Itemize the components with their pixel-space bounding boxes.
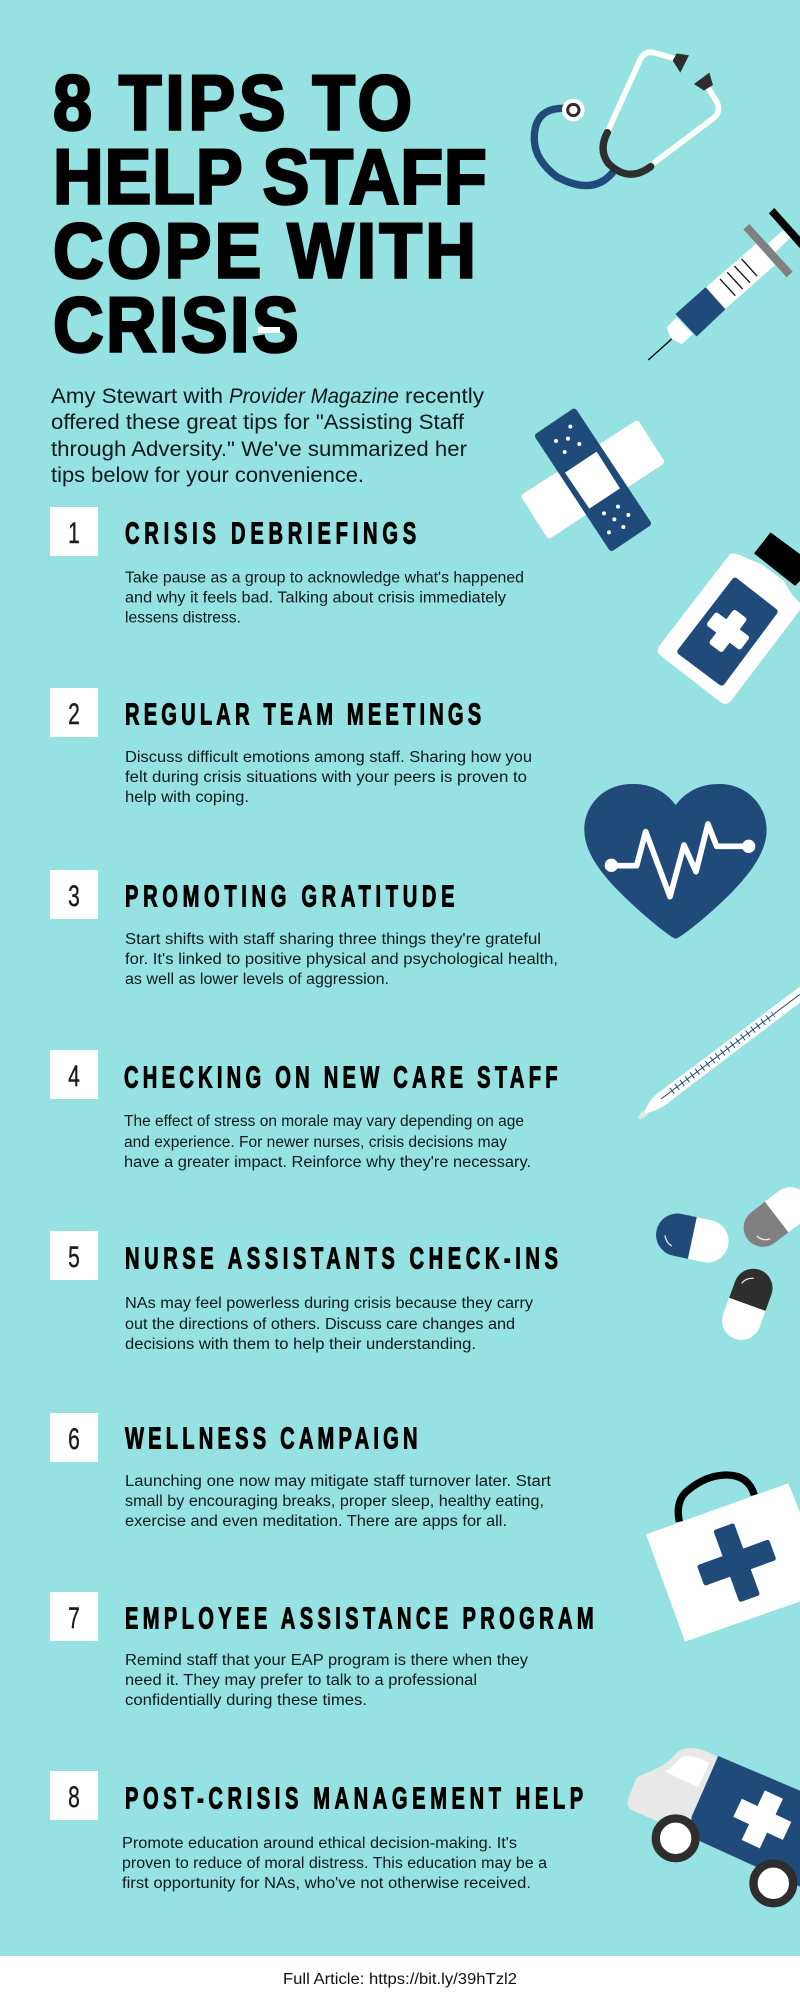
footer link text: Full Article: https://bit.ly/39hTzl2: [283, 1971, 517, 1988]
body text: tip 2: [125, 749, 532, 806]
number badge 3: 3: [68, 881, 80, 913]
icon: syringe: [648, 208, 800, 360]
body text: tip 8: first opportunity for NAs, who've not otherwise received.: [122, 1875, 531, 1892]
intro text: recently: [405, 385, 485, 408]
panel: tip 7: [50, 1592, 594, 1709]
number badge 8: [50, 1771, 98, 1820]
body text: tip 4: and experience. For newer nurses, crisis decisions may: [124, 1134, 507, 1151]
number badge 4: [50, 1050, 98, 1099]
number badge 2: 2: [68, 699, 80, 731]
heading: post-crisis management help: POST-CRISIS MANAGEMENT HELP: [125, 1780, 583, 1816]
heading: nurse assistants check-ins: NURSE ASSISTANTS CHECK-INS: [125, 1240, 558, 1276]
icon: bandage: [525, 412, 661, 548]
body text: tip 6: Launching one now may mitigate staff turnover later. Start: [125, 1473, 552, 1490]
body text: tip 2: felt during crisis situations with your peers is proven to: [125, 769, 527, 786]
number badge 6: 6: [68, 1424, 80, 1456]
body text: tip 5: out the directions of others. Discuss care changes and: [125, 1316, 515, 1333]
body text: tip 1: [125, 570, 524, 626]
panel: tip 8: [50, 1771, 583, 1892]
heading: wellness campaign: WELLNESS CAMPAIGN: [125, 1420, 418, 1456]
number badge 6: [50, 1413, 98, 1462]
body text: tip 8: [122, 1835, 547, 1892]
icon: thermometer: [638, 987, 800, 1119]
icon: heart with pulse: [584, 784, 767, 939]
number badge 3: [50, 870, 98, 919]
heading: crisis debriefings: CRISIS DEBRIEFINGS: [125, 515, 416, 551]
body text: tip 3: [125, 931, 558, 988]
body text: tip 4: The effect of stress on morale may vary depending on age: [124, 1113, 524, 1130]
title: [53, 59, 487, 368]
title: 8 TIPS TO: [53, 59, 412, 146]
icon: pills: [652, 1179, 800, 1345]
intro text: tips below for your convenience.: [51, 464, 364, 487]
intro text: Amy Stewart with: [51, 385, 223, 408]
number badge 7: [50, 1592, 98, 1641]
body text: tip 8: proven to reduce of moral distress. This education may be a: [122, 1855, 547, 1872]
body text: tip 3: Start shifts with staff sharing three things they're grateful: [125, 931, 541, 948]
title: HELP STAFF: [53, 133, 487, 220]
title: COPE WITH: [53, 207, 476, 294]
icon: medicine bottle: [658, 533, 800, 704]
intro text: through Adversity." We've summarized her: [51, 438, 467, 461]
body text: tip 3: for. It's linked to positive physical and psychological health,: [125, 951, 558, 968]
number badge 8: 8: [68, 1782, 80, 1814]
intro text: [51, 385, 485, 487]
body text: tip 7: need it. They may prefer to talk to a professional: [125, 1672, 477, 1689]
body text: tip 5: [125, 1295, 533, 1353]
body text: tip 6: exercise and even meditation. There are apps for all.: [125, 1513, 507, 1530]
body text: tip 4: [124, 1113, 531, 1171]
heading: checking on new care staff: CHECKING ON NEW CARE STAFF: [124, 1059, 558, 1095]
footer band: [0, 1956, 800, 2000]
intro text: Provider Magazine: [229, 385, 399, 408]
number badge 1: [50, 507, 98, 556]
panel: tip 2: [50, 688, 532, 806]
panel: tip 6: [50, 1413, 552, 1530]
body text: tip 7: Remind staff that your EAP program is there when they: [125, 1652, 528, 1669]
body text: tip 6: [125, 1473, 552, 1530]
panel: tip 4: [50, 1050, 558, 1171]
body text: tip 6: small by encouraging breaks, proper sleep, healthy eating,: [125, 1493, 544, 1510]
body text: tip 7: confidentially during these times.: [125, 1692, 367, 1709]
icon: stethoscope: [534, 52, 719, 186]
icon: first aid kit: [646, 1475, 800, 1642]
panel: tip 5: [50, 1231, 558, 1353]
body text: tip 3: as well as lower levels of aggression.: [125, 971, 389, 988]
body text: tip 5: NAs may feel powerless during crisis because they carry: [125, 1295, 533, 1312]
icon: ambulance: [628, 1748, 800, 1903]
number badge 2: [50, 688, 98, 737]
number badge 1: 1: [68, 518, 80, 550]
body text: tip 2: Discuss difficult emotions among staff. Sharing how you: [125, 749, 532, 766]
body text: tip 4: have a greater impact. Reinforce why they're necessary.: [124, 1154, 531, 1171]
body text: tip 1: Take pause as a group to acknowledge what's happened: [125, 570, 524, 586]
heading: regular team meetings: REGULAR TEAM MEETINGS: [125, 696, 481, 732]
body text: tip 1: lessens distress.: [125, 610, 241, 626]
heading: promoting gratitude: PROMOTING GRATITUDE: [125, 878, 455, 914]
panel: tip 3: [50, 870, 558, 988]
body text: tip 7: [125, 1652, 528, 1709]
number badge 7: 7: [68, 1603, 80, 1635]
body text: tip 1: and why it feels bad. Talking about crisis immediately: [125, 590, 506, 606]
panel: tip 1: [50, 507, 524, 626]
title: CRISIS: [53, 281, 299, 368]
body text: tip 2: help with coping.: [125, 789, 249, 806]
body text: tip 5: decisions with them to help their understanding.: [125, 1336, 476, 1353]
heading: employee assistance program: EMPLOYEE ASSISTANCE PROGRAM: [125, 1600, 594, 1636]
body text: tip 8: Promote education around ethical decision-making. It's: [122, 1835, 517, 1852]
intro text: offered these great tips for "Assisting Staff: [51, 411, 464, 434]
number badge 4: 4: [68, 1061, 80, 1093]
number badge 5: 5: [68, 1242, 80, 1274]
number badge 5: [50, 1231, 98, 1280]
